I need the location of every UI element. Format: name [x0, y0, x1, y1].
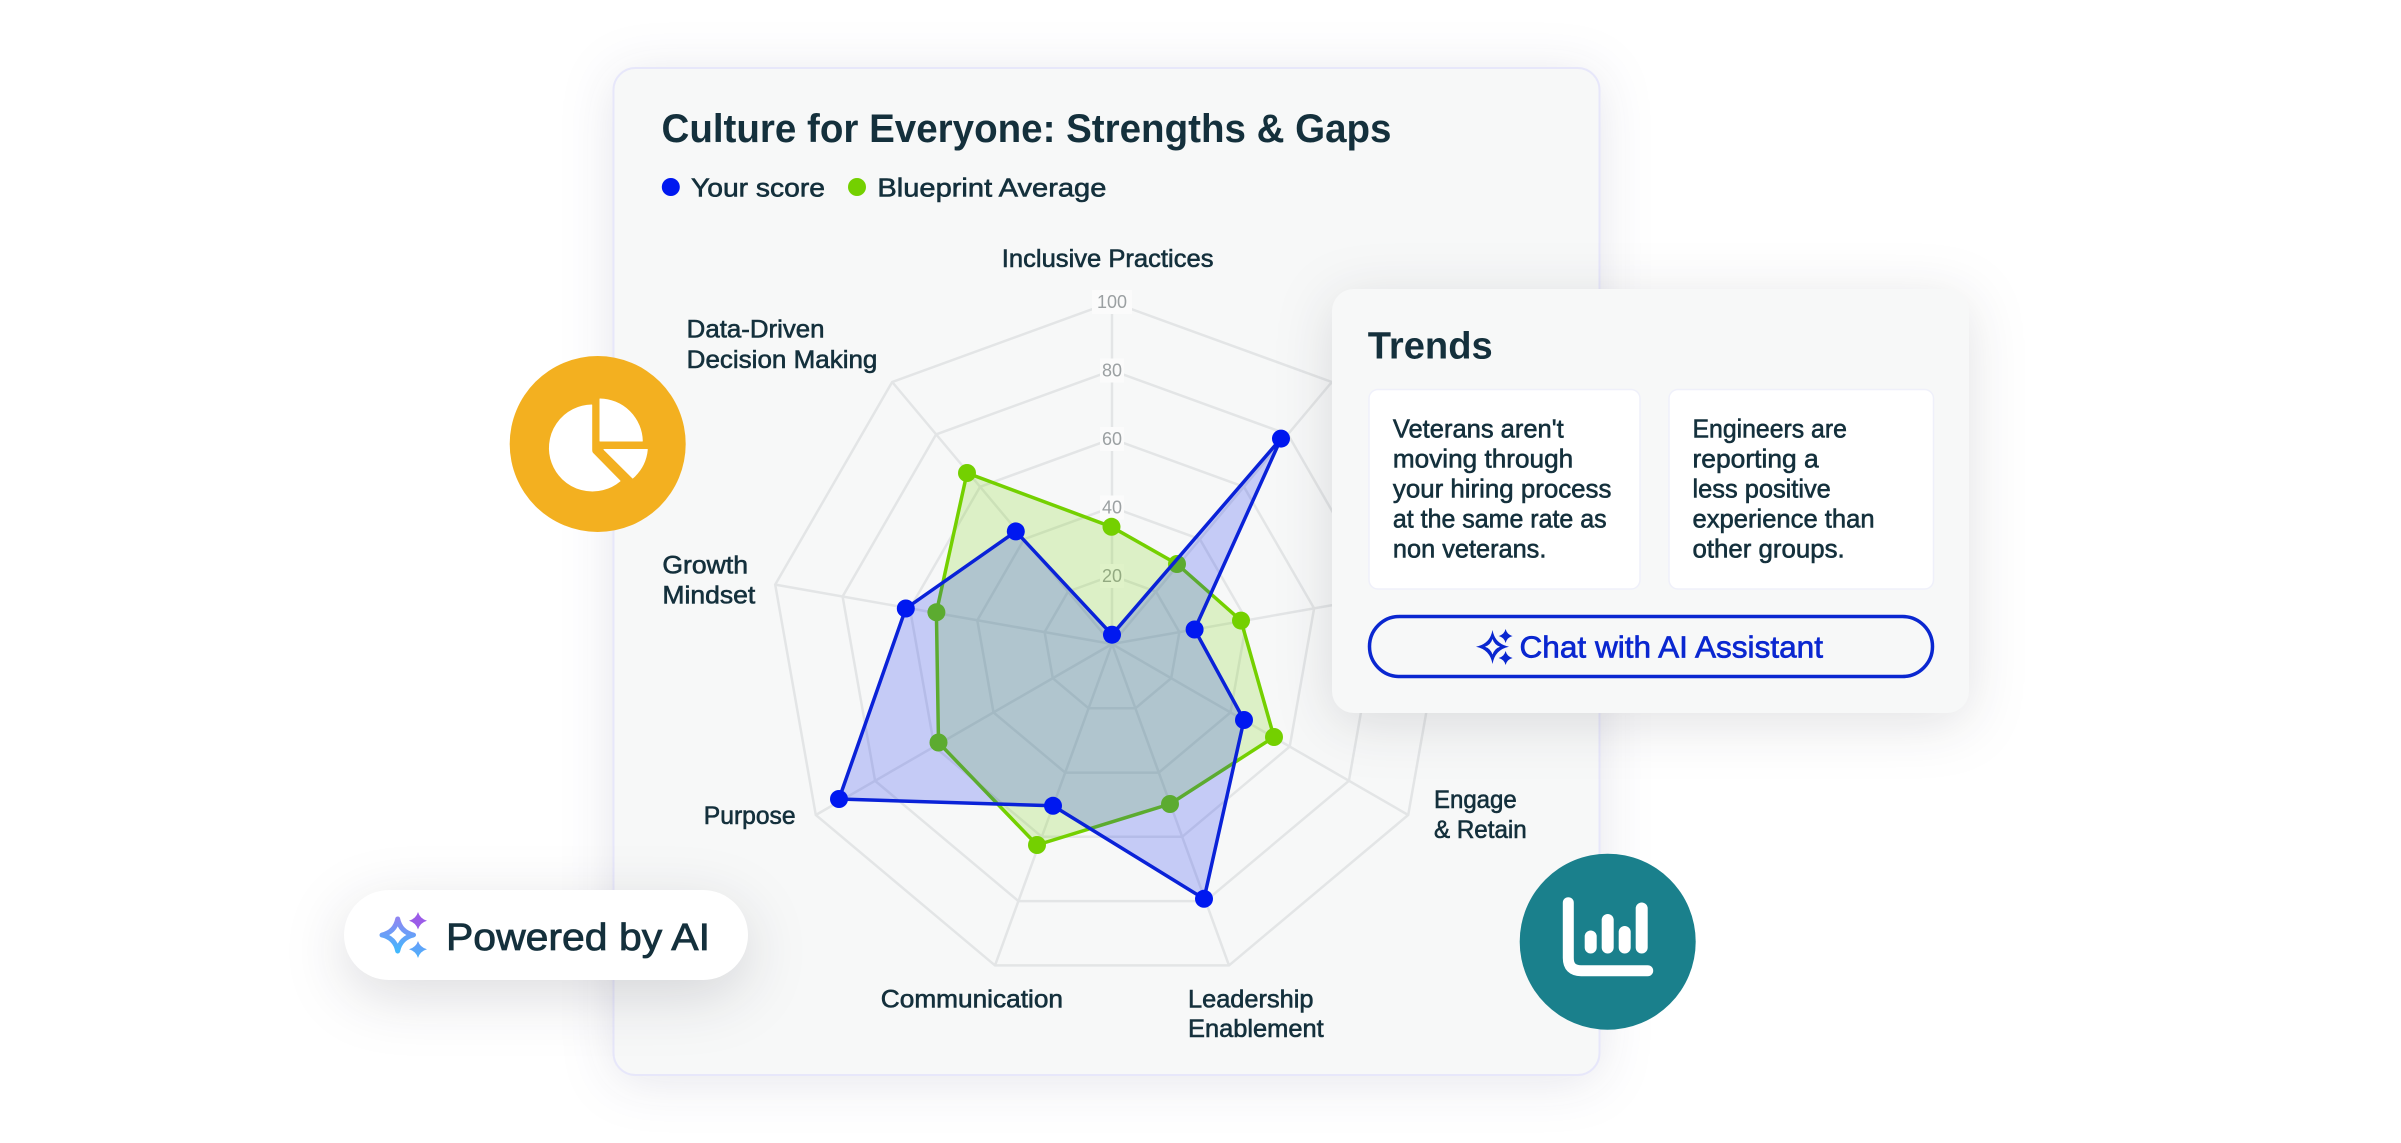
scale ticks: 80	[1102, 360, 1122, 380]
legend	[662, 172, 1106, 202]
radar chart	[662, 245, 1527, 1043]
axis labels: Decision Making	[687, 346, 877, 374]
series: your score	[830, 430, 1290, 908]
axis labels: Engage	[1434, 786, 1517, 814]
axis labels: Enablement	[1188, 1015, 1324, 1043]
axis labels: Inclusive Practices	[1002, 245, 1214, 273]
scale ticks: 100	[1097, 292, 1127, 312]
legend dot: your score	[662, 178, 680, 196]
trend card: veterans: moving through	[1393, 443, 1573, 473]
pill label: Powered by AI	[446, 917, 710, 959]
pill background	[344, 890, 748, 980]
icon: gradient sparkles	[382, 912, 427, 958]
radar grid	[775, 302, 1449, 965]
trend card: veterans: Veterans aren't	[1393, 413, 1564, 443]
axis labels: Communication	[881, 986, 1063, 1014]
legend label: blueprint average: Blueprint Average	[877, 172, 1106, 202]
button: chat with AI assistant	[1370, 616, 1932, 676]
trend card: veterans: at the same rate as	[1393, 503, 1607, 533]
panel: trends	[1332, 289, 1969, 713]
axis labels: Growth	[662, 552, 748, 580]
panel: radar chart card	[614, 68, 1600, 1075]
trend card: engineers: Engineers are	[1692, 413, 1847, 443]
scale ticks	[1092, 290, 1132, 588]
callout: powered by AI pill	[344, 890, 748, 980]
trend card: veterans: your hiring process	[1393, 473, 1611, 503]
axis labels: Data-Driven	[687, 316, 824, 344]
icon: pie chart badge	[510, 356, 686, 532]
axis labels	[662, 245, 1527, 1043]
trend card: engineers: experience than	[1692, 503, 1875, 533]
legend dot: blueprint average	[848, 178, 866, 196]
trend card: veterans	[1369, 390, 1640, 589]
trends heading: Trends	[1368, 325, 1493, 367]
trend card: engineers: less positive	[1692, 473, 1831, 503]
axis labels: Mindset	[662, 582, 755, 610]
scale ticks: 20	[1102, 566, 1122, 586]
legend label: your score: Your score	[691, 172, 825, 202]
trend card: engineers: other groups.	[1692, 533, 1845, 563]
axis labels: Purpose	[704, 802, 796, 830]
icon: bar chart badge	[1520, 854, 1696, 1030]
trend card: engineers	[1669, 390, 1934, 589]
trends card background	[1332, 289, 1969, 713]
axis labels: & Retain	[1434, 816, 1527, 844]
card background	[614, 68, 1600, 1075]
trend card: engineers: reporting a	[1692, 443, 1819, 473]
title: Culture for Everyone: Strengths & Gaps	[662, 107, 1392, 151]
series: blueprint average	[927, 464, 1283, 854]
button label: Chat with AI Assistant	[1520, 630, 1823, 665]
scale ticks: 60	[1102, 429, 1122, 449]
scale ticks: 40	[1102, 498, 1122, 518]
trend card: veterans: non veterans.	[1393, 533, 1546, 563]
axis labels: Leadership	[1188, 986, 1314, 1014]
icon: button sparkles	[1476, 629, 1513, 665]
